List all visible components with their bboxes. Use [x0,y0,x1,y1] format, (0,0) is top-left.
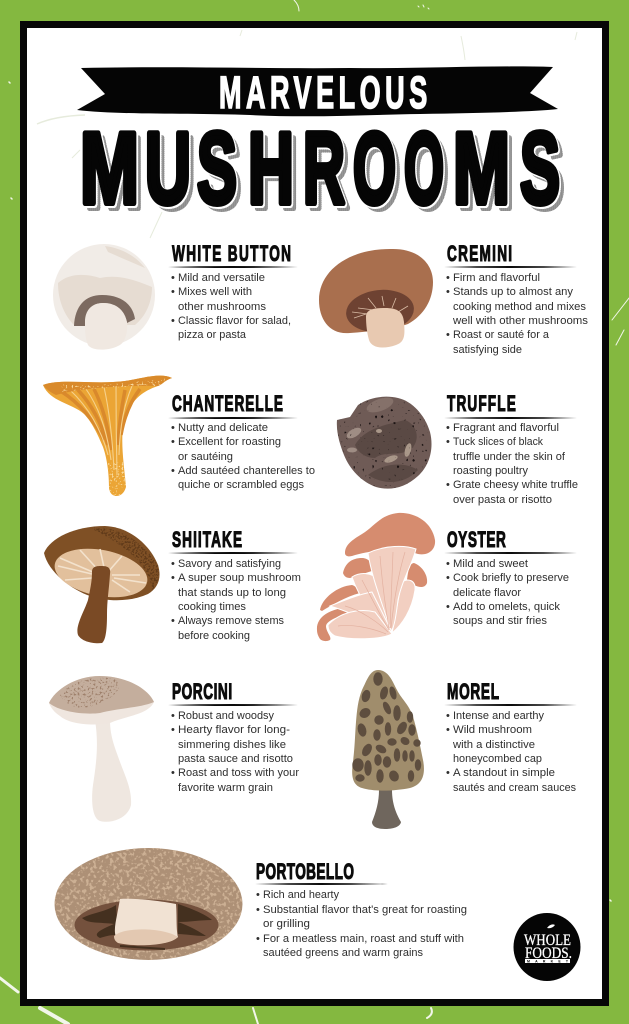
facts: Substantial flavor that's great for roasting [263,904,467,916]
facts: soups and stir fries [453,615,547,627]
heading: OYSTER [447,527,506,552]
heading: CHANTERELLE [172,391,283,416]
title word MUSHROOMS with offset shadow: R [303,113,345,225]
title word MUSHROOMS with offset shadow: H [252,118,298,230]
title word MUSHROOMS with offset shadow: O [353,113,396,225]
facts: • [256,933,260,945]
facts: satisfying side [453,344,522,356]
facts [446,272,589,356]
title word MUSHROOMS with offset shadow: S [202,118,242,230]
facts: roasting poultry [453,465,528,477]
heading: TRUFFLE [447,391,516,416]
panel: white button [53,241,298,350]
facts: Add to omelets, quick [453,601,561,613]
facts: • [171,422,175,434]
title word MUSHROOMS with offset shadow: O [358,118,400,230]
title word MUSHROOMS with offset shadow: S [520,113,560,225]
facts [171,422,315,491]
facts: • [446,767,450,779]
panel: morel [352,670,577,829]
panel: porcini [49,676,299,822]
facts: before cooking [178,630,250,642]
panel: portobello [54,848,467,960]
facts: favorite warm grain [178,782,273,794]
title word MUSHROOMS with offset shadow: M [80,113,139,225]
facts: • [171,724,175,736]
heading: PORCINI [172,679,232,704]
facts: • [446,572,450,584]
facts: • [446,286,450,298]
facts: • [171,710,175,722]
facts: A super soup mushroom [178,572,301,584]
facts: Grate cheesy white truffle [453,479,578,491]
facts: Nutty and delicate [178,422,268,434]
facts: • [171,615,175,627]
facts: quiche or scrambled eggs [178,479,304,491]
facts: Roast or sauté for a [453,329,550,341]
facts: sautéed greens and warm grains [263,947,423,959]
facts: Wild mushroom [453,724,532,736]
facts: Mixes well with [178,286,252,298]
facts: Roast and toss with your [178,767,299,779]
title word MUSHROOMS with offset shadow: S [198,114,238,226]
facts: cooking times [178,601,246,613]
heading: CREMINI [447,241,512,266]
facts: • [446,724,450,736]
logo: Whole Foods Market: MARKET [527,960,569,964]
icon: chanterelle mushroom [43,376,172,496]
heading: SHIITAKE [172,527,242,552]
title word MUSHROOMS with offset shadow: M [454,114,511,226]
facts: Savory and satisfying [178,558,281,570]
title word MUSHROOMS with offset shadow: M [458,118,514,230]
facts: Stands up to almost any [453,286,574,298]
facts: or grilling [263,918,310,930]
icon: portobello mushroom [54,848,242,960]
title word MUSHROOMS with offset shadow: O [408,118,448,230]
title word MUSHROOMS with offset shadow: S [521,114,561,226]
facts: honeycombed cap [453,753,542,765]
facts: that stands up to long [178,587,286,599]
facts: pasta sauce and risotto [178,753,293,765]
panel: oyster [317,513,577,641]
facts: Classic flavor for salad, [178,315,291,327]
facts [446,558,569,627]
logo: Whole Foods Market: FOODS. [525,945,572,962]
title word MUSHROOMS with offset shadow: M [81,114,140,226]
title word MUSHROOMS with offset shadow: S [197,113,237,225]
icon: porcini mushroom [49,676,154,822]
facts: Mild and versatile [178,272,265,284]
title word MUSHROOMS with offset shadow: U [146,114,192,226]
icon: cremini mushroom [319,249,433,348]
facts: • [446,329,450,341]
icon: oyster mushroom [317,513,435,641]
faint scratches on paper [37,30,577,238]
facts: well with other mushrooms [452,315,589,327]
facts: • [256,904,260,916]
icon: white button mushroom [53,244,155,350]
facts: Always remove stems [178,615,284,627]
panel: cremini [319,241,589,356]
facts: Intense and earthy [453,710,544,722]
facts: Cook briefly to preserve [453,572,569,584]
facts: • [171,436,175,448]
facts: • [171,465,175,477]
facts: A standout in simple [453,767,555,779]
panel: chanterelle [43,376,315,496]
icon: shiitake mushroom [44,526,160,643]
title word MUSHROOMS with offset shadow [80,113,564,230]
facts: Firm and flavorful [453,272,540,284]
facts: Add sautéed chanterelles to [178,465,315,477]
facts: pizza or pasta [178,329,247,341]
title [77,66,564,230]
facts: truffle under the skin of [453,451,566,463]
title word MUSHROOMS with offset shadow: O [405,114,445,226]
facts: • [171,558,175,570]
facts: • [171,572,175,584]
facts: simmering dishes like [178,739,286,751]
facts: • [256,889,260,901]
facts [171,558,301,642]
facts: • [446,479,450,491]
facts: • [171,272,175,284]
panel: shiitake [44,526,301,643]
facts: • [171,767,175,779]
facts: other mushrooms [178,301,267,313]
title word MUSHROOMS with offset shadow: O [404,113,444,225]
facts: Fragrant and flavorful [453,422,559,434]
heading: PORTOBELLO [256,859,354,884]
facts: Mild and sweet [453,558,528,570]
facts: cooking method and mixes [453,301,586,313]
panel: truffle [337,391,578,506]
facts [446,710,576,794]
title word MUSHROOMS with offset shadow: H [249,114,295,226]
facts: Robust and woodsy [178,710,274,722]
title banner: MARVELOUS [219,67,427,118]
facts: or sautéing [178,451,233,463]
facts [171,272,291,341]
title word MUSHROOMS with offset shadow: U [145,113,191,225]
heading: WHITE BUTTON [172,241,291,266]
icon: morel mushroom [352,670,424,829]
facts: Rich and hearty [263,889,339,901]
heading: MOREL [447,679,499,704]
facts: • [446,422,450,434]
facts [256,889,467,959]
title word MUSHROOMS with offset shadow: M [84,118,144,230]
title word MUSHROOMS with offset shadow: R [304,114,346,226]
facts: • [171,286,175,298]
title word MUSHROOMS with offset shadow: R [308,118,350,230]
facts: For a meatless main, roast and stuff with [263,933,464,945]
title word MUSHROOMS with offset shadow: O [354,114,397,226]
title word MUSHROOMS with offset shadow: H [248,113,294,225]
facts: with a distinctive [452,739,535,751]
facts: Excellent for roasting [178,436,281,448]
title word MUSHROOMS with offset shadow: U [150,118,196,230]
icon: truffle [337,395,432,489]
facts: delicate flavor [453,587,521,599]
facts: sautés and cream sauces [453,782,576,794]
facts [446,422,578,506]
title banner [77,66,558,118]
facts: • [171,315,175,327]
facts: over pasta or risotto [453,494,552,506]
facts: • [446,436,450,448]
logo: Whole Foods Market: WHOLE [524,932,571,949]
facts: • [446,710,450,722]
facts: • [446,272,450,284]
facts: Hearty flavor for long- [178,724,290,736]
facts [171,710,299,794]
facts: • [446,558,450,570]
title word MUSHROOMS with offset shadow: M [453,113,510,225]
title word MUSHROOMS with offset shadow: S [524,118,564,230]
facts: • [446,601,450,613]
logo: Whole Foods Market [514,913,580,981]
facts: Tuck slices of black [453,436,543,448]
